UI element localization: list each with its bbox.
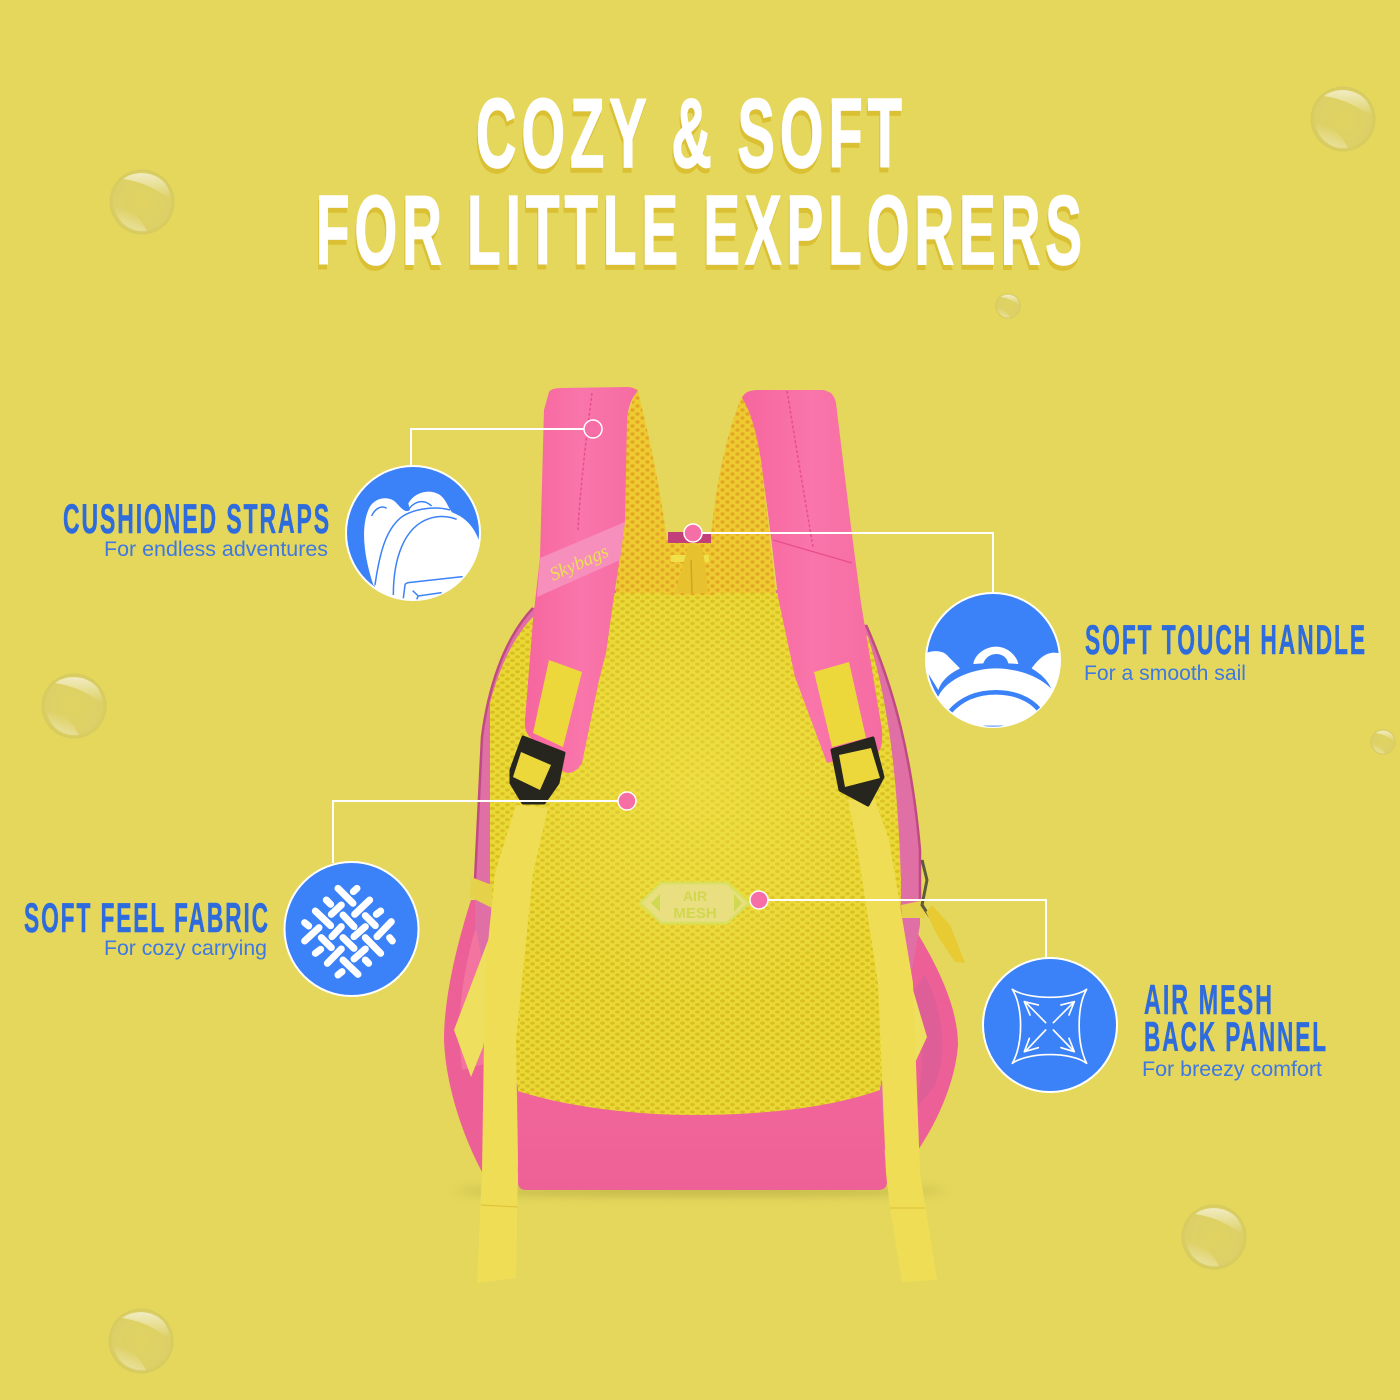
callout: soft feel fabric <box>24 792 636 996</box>
heading: cushioned straps: CUSHIONED STRAPS <box>63 495 331 542</box>
top handle <box>668 532 711 593</box>
marker: cushioned straps <box>584 420 602 438</box>
inner mesh flaps <box>616 388 776 593</box>
leader line: soft feel fabric <box>333 801 627 863</box>
heading: air mesh: AIR MESH <box>1144 976 1274 1023</box>
backpack illustration <box>444 387 965 1283</box>
callout: air mesh back panel <box>750 891 1328 1092</box>
callout: cushioned straps <box>63 420 602 603</box>
rim zipper edges <box>475 608 920 905</box>
leader line: cushioned straps <box>411 429 593 466</box>
air mesh badge <box>640 883 749 923</box>
left buckle and webbing <box>511 660 582 803</box>
subtext: cushioned straps: For endless adventures <box>104 538 328 561</box>
callout: soft touch handle <box>684 524 1367 732</box>
ground shadow <box>455 1187 945 1195</box>
body rim <box>475 590 920 1150</box>
left shoulder strap <box>525 387 637 773</box>
left shoulder strap: Skybags <box>546 541 612 586</box>
leader line: soft touch handle <box>693 533 993 594</box>
air mesh badge: MESH <box>673 905 717 922</box>
upper mesh behind handle <box>665 540 715 595</box>
lower right strap <box>848 800 937 1282</box>
subtext: soft feel fabric: For cozy carrying <box>104 937 267 960</box>
back mesh panel <box>490 593 901 1115</box>
icon: backpack <box>346 466 482 603</box>
icon: handle <box>923 593 1063 732</box>
title: COZY & SOFT <box>476 78 907 188</box>
pocket bands <box>470 877 925 918</box>
marker: soft feel fabric <box>618 792 636 810</box>
marker: air mesh <box>750 891 768 909</box>
leader line: air mesh <box>759 900 1046 959</box>
right shoulder strap <box>742 390 882 763</box>
right buckle and webbing <box>814 662 883 805</box>
icon: woven fabric <box>284 862 418 996</box>
base panel <box>518 1090 887 1190</box>
heading: soft feel fabric: SOFT FEEL FABRIC <box>24 894 270 941</box>
subtext: soft touch handle: For a smooth sail <box>1084 662 1246 685</box>
zipper pull and tassel <box>922 860 965 963</box>
icon: stretch arrows <box>983 958 1117 1092</box>
side pockets <box>444 900 958 1172</box>
marker: soft touch handle <box>684 524 702 542</box>
lower left strap <box>454 805 548 1283</box>
air mesh badge: AIR <box>683 888 707 904</box>
title <box>316 78 1087 285</box>
subtext: air mesh: For breezy comfort <box>1142 1058 1322 1081</box>
